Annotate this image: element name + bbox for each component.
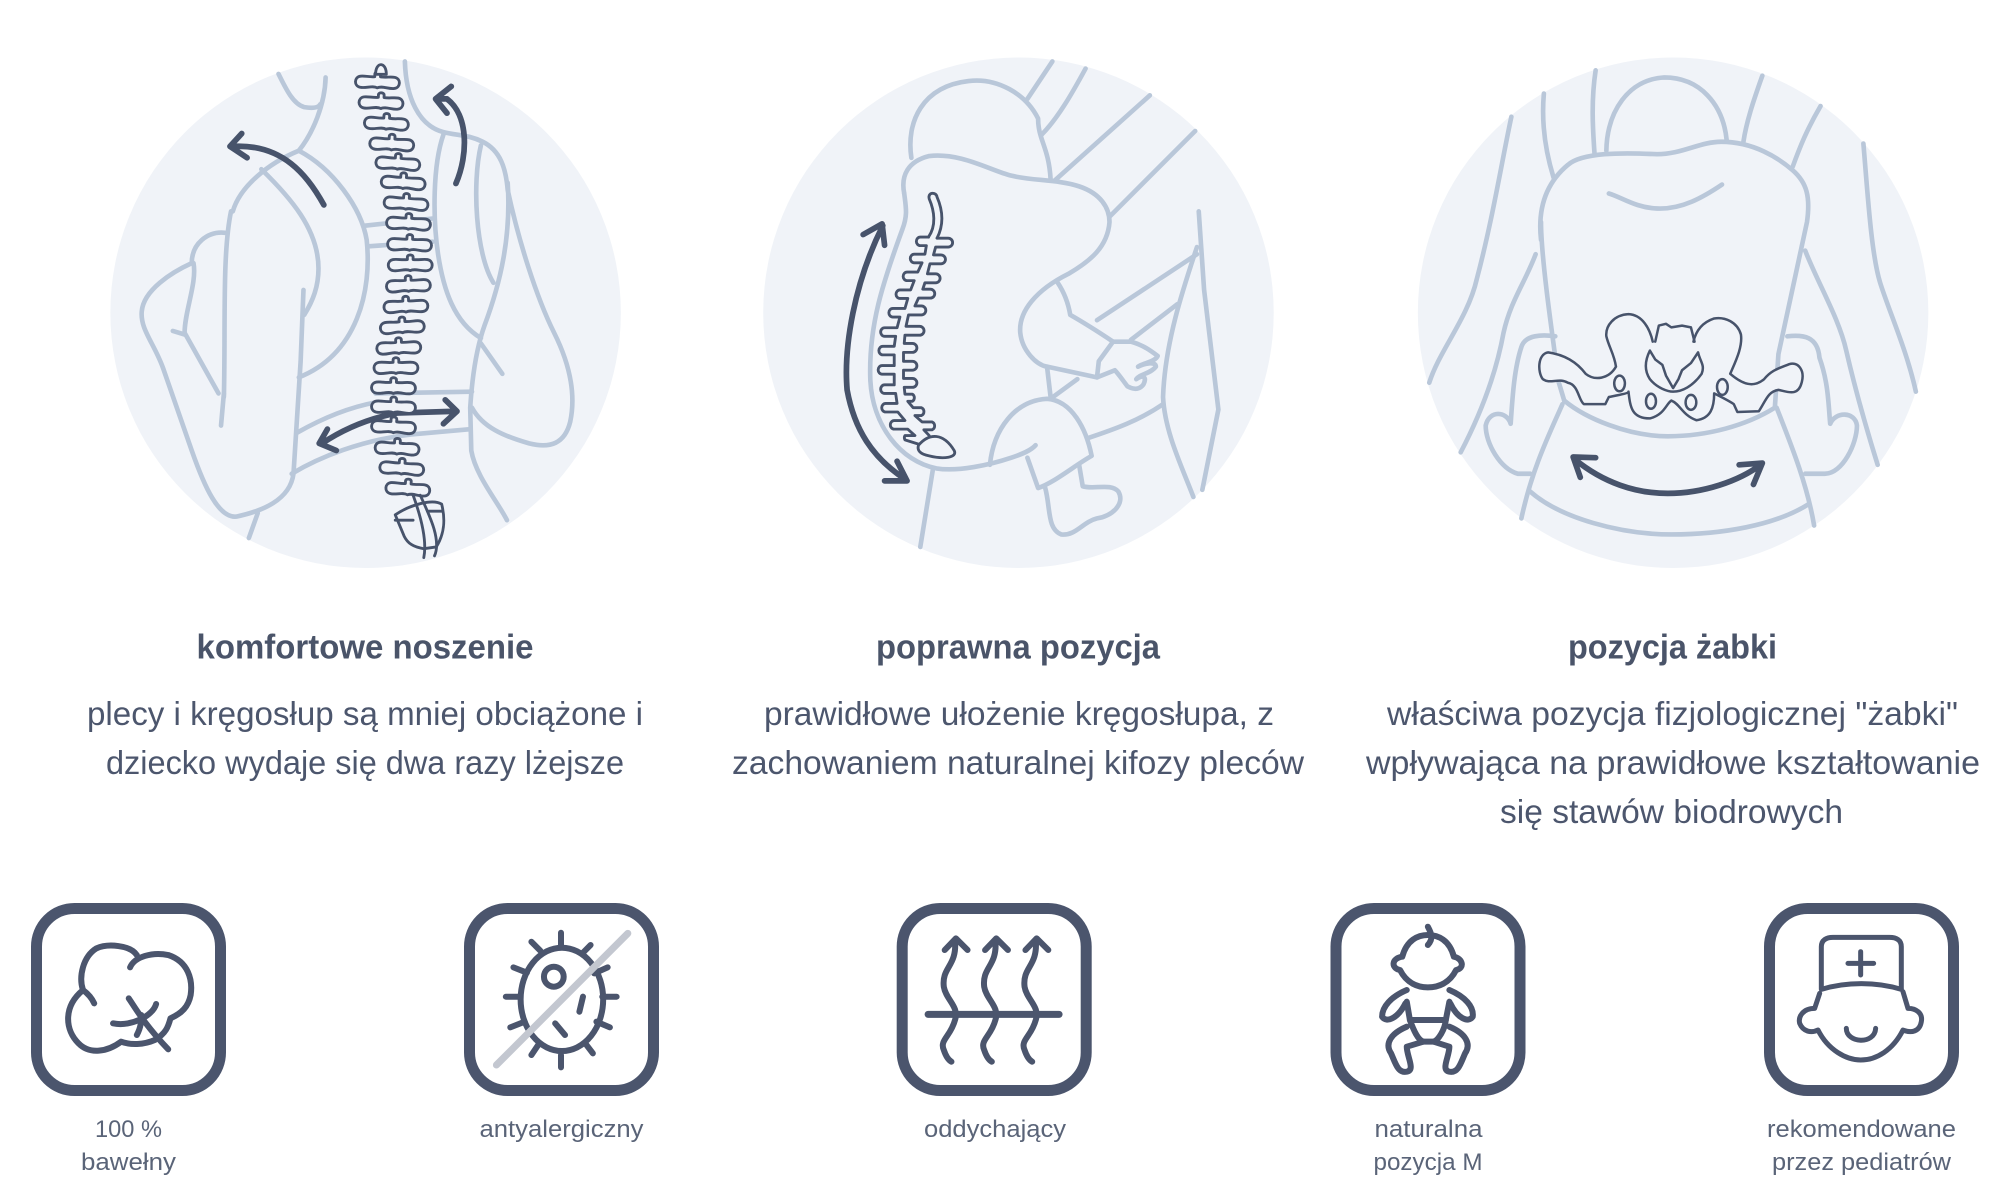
label: bawełny — [81, 1149, 176, 1176]
panel: poprawna pozycja — [732, 57, 1304, 781]
arrow: spread of legs — [1573, 457, 1762, 493]
icon frame — [470, 908, 654, 1090]
label: antyalergiczny — [480, 1116, 644, 1143]
icon: crossed bacteria — [496, 933, 628, 1067]
circle background — [110, 57, 621, 568]
illustration: back with spine — [110, 57, 621, 568]
panel: pozycja żabki — [1365, 57, 1980, 830]
illustration: frog position from behind — [1418, 57, 1928, 568]
arrow: shoulder left — [230, 134, 324, 205]
circle background — [763, 57, 1274, 568]
label — [1767, 1116, 1956, 1176]
description — [1365, 695, 1980, 830]
heading: pozycja żabki — [1568, 628, 1777, 666]
wearer and baby outline — [142, 61, 572, 538]
baby and carrier outline — [870, 61, 1218, 547]
description: zachowaniem naturalnej kifozy pleców — [732, 744, 1304, 781]
feature: rekomendowane przez pediatrów — [1767, 908, 1956, 1176]
label — [1374, 1116, 1483, 1176]
label: pozycja M — [1374, 1149, 1482, 1176]
illustration: baby in carrier, side view — [763, 57, 1274, 568]
icon frame — [36, 908, 220, 1090]
pelvis — [1539, 314, 1803, 420]
label: 100 % — [95, 1116, 162, 1143]
icon: baby — [1382, 927, 1473, 1072]
label — [81, 1116, 176, 1176]
feature: oddychający — [902, 908, 1086, 1143]
label: przez pediatrów — [1772, 1149, 1952, 1176]
description — [87, 695, 643, 781]
spine — [355, 65, 444, 558]
feature: naturalna pozycja M — [1336, 908, 1520, 1176]
description — [732, 695, 1304, 781]
arrow: back curve — [846, 224, 907, 481]
icon frame — [902, 908, 1086, 1090]
arrow: hip belt — [319, 400, 457, 451]
description: dziecko wydaje się dwa razy lżejsze — [106, 744, 624, 781]
panel: komfortowe noszenie — [87, 57, 643, 781]
description: wpływająca na prawidłowe kształtowanie — [1365, 744, 1980, 781]
icon frame — [1336, 908, 1520, 1090]
arrow: shoulder right — [436, 86, 464, 184]
heading: poprawna pozycja — [876, 628, 1161, 666]
icon: doctor — [1799, 937, 1922, 1060]
icon: cotton — [68, 946, 191, 1051]
icon: breathable fabric — [928, 938, 1059, 1062]
heading: komfortowe noszenie — [196, 628, 534, 666]
spine — [878, 193, 955, 458]
description: plecy i kręgosłup są mniej obciążone i — [87, 695, 643, 732]
baby and wearer outline — [1429, 70, 1916, 534]
icon frame — [1770, 908, 1954, 1090]
label: oddychający — [924, 1116, 1066, 1143]
feature: antyalergiczny — [470, 908, 654, 1143]
label: rekomendowane — [1767, 1116, 1956, 1143]
feature: 100% bawełny — [36, 908, 220, 1176]
description: właściwa pozycja fizjologicznej "żabki" — [1386, 695, 1958, 732]
circle background — [1418, 57, 1928, 568]
label: naturalna — [1374, 1116, 1483, 1143]
description: prawidłowe ułożenie kręgosłupa, z — [764, 695, 1274, 732]
description: się stawów biodrowych — [1500, 793, 1843, 830]
